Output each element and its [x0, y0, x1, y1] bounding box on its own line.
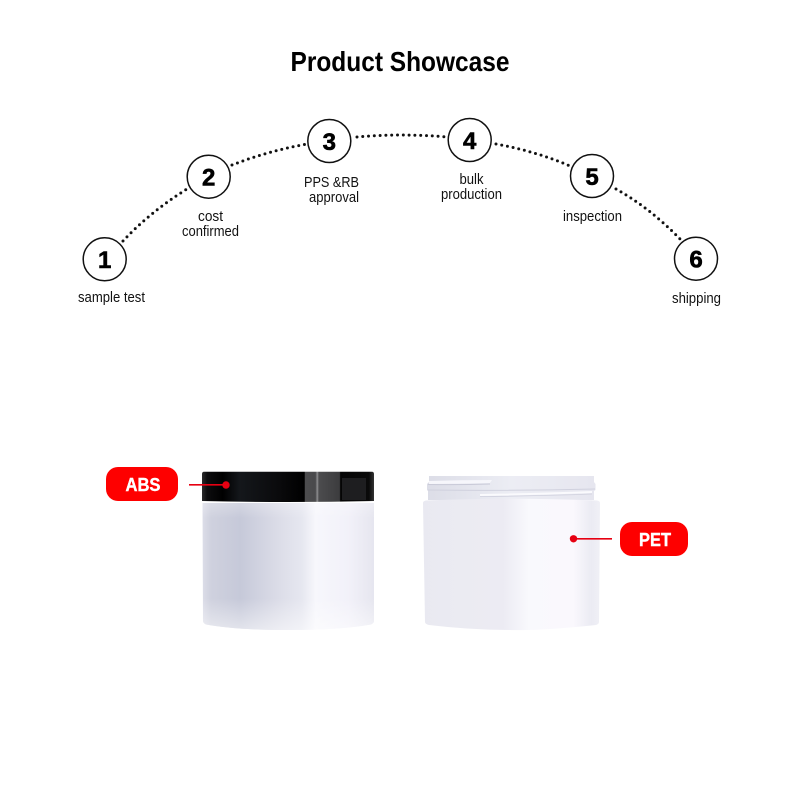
- step 6: shipping: shipping: [672, 290, 721, 307]
- dotted arc: process path: [123, 135, 680, 241]
- step 1: sample test: sample test: [78, 289, 146, 306]
- step 5: inspection: inspection: [563, 208, 622, 225]
- step 2: cost confirmed: confirmed: [182, 223, 239, 240]
- callout: ABS: ABS: [126, 475, 160, 495]
- step 4: bulk production: 4: [463, 128, 477, 155]
- step 1: sample test: [78, 238, 146, 306]
- jar neck: [427, 476, 596, 500]
- step 3: PPS &RB approval: 3: [323, 129, 336, 156]
- step 1: sample test: 1: [98, 247, 111, 274]
- step 6: shipping: [672, 237, 721, 307]
- callout: PET: PET: [639, 530, 671, 550]
- step 6: shipping: 6: [689, 246, 703, 274]
- step 3: PPS &RB approval: [304, 120, 359, 206]
- callout: PET: [570, 522, 688, 556]
- step 5: inspection: [563, 154, 622, 225]
- callout: ABS: [106, 467, 230, 501]
- step 2: cost confirmed: [182, 155, 239, 240]
- step 4: bulk production: production: [441, 186, 502, 203]
- step 3: PPS &RB approval: approval: [309, 189, 359, 206]
- jar: PET open with threaded neck: [423, 476, 600, 630]
- step 2: cost confirmed: 2: [202, 164, 215, 192]
- step 4: bulk production: [441, 118, 502, 203]
- jar cap: [202, 472, 374, 502]
- step 5: inspection: 5: [585, 164, 599, 191]
- jar body: [423, 499, 600, 630]
- title: Product Showcase: [290, 46, 510, 77]
- jar: ABS with black cap: [202, 472, 374, 630]
- step 4: bulk production: bulk: [460, 171, 484, 188]
- step 3: PPS &RB approval: PPS &RB: [304, 174, 359, 191]
- step 2: cost confirmed: cost: [198, 208, 224, 225]
- jar body: [202, 503, 374, 630]
